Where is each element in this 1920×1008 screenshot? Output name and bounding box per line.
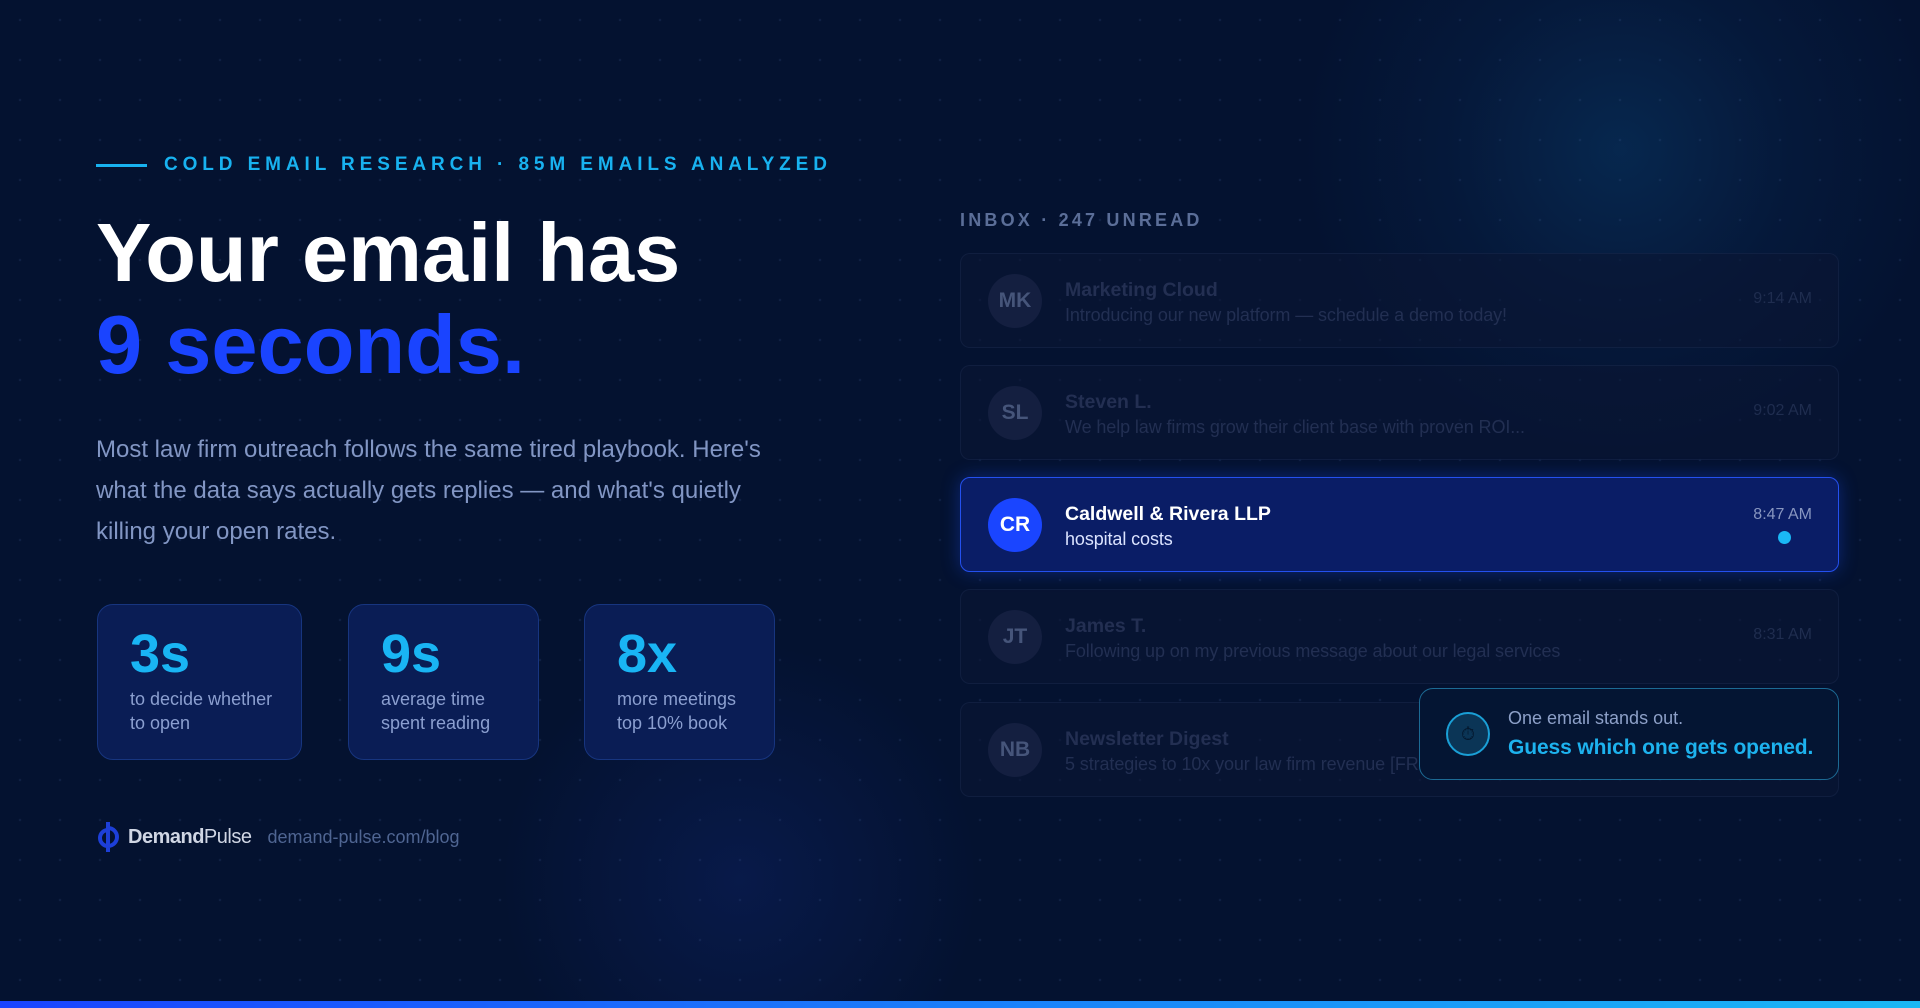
stat card: 3s bbox=[97, 604, 302, 760]
email row: MK: Marketing Cloud bbox=[1065, 279, 1218, 301]
stat card: 3s: to open bbox=[130, 713, 190, 733]
bottom bar bbox=[0, 1001, 1920, 1008]
inbox header: INBOX · 247 UNREAD bbox=[960, 210, 1203, 230]
email row: SL: Steven L. bbox=[1065, 391, 1152, 413]
icon: stopwatch: ⏱ bbox=[1461, 724, 1475, 744]
icon: stopwatch bbox=[1446, 712, 1490, 756]
email row: CR highlighted: 8:47 AM bbox=[1753, 506, 1812, 523]
email row: MK: Introducing our new platform — schedule a demo today! bbox=[1065, 305, 1507, 325]
eyebrow: COLD EMAIL RESEARCH · 85M EMAILS ANALYZED bbox=[164, 154, 832, 175]
footer brand bbox=[98, 822, 460, 852]
email row: CR highlighted: hospital costs bbox=[1065, 529, 1173, 549]
email row: JT: Following up on my previous message about our legal services bbox=[1065, 641, 1560, 661]
email row: SL: We help law firms grow their client base with proven ROI... bbox=[1065, 417, 1525, 437]
email row: NB: 5 strategies to 10x your law firm revenue [FREE GUIDE] bbox=[1065, 754, 1509, 774]
stat card: 3s: 3s bbox=[130, 624, 190, 684]
email row: NB: 8:15 AM bbox=[1753, 739, 1812, 756]
email row: MK: 9:14 AM bbox=[1753, 290, 1812, 307]
email row: SL: SL bbox=[1002, 401, 1028, 424]
email row: MK bbox=[960, 253, 1839, 348]
email row: NB bbox=[960, 702, 1839, 797]
title: 9 seconds. bbox=[96, 298, 525, 391]
footer brand: demand-pulse.com/blog bbox=[267, 826, 460, 846]
stat card: 8x: top 10% book bbox=[617, 713, 727, 733]
callout bbox=[1419, 688, 1839, 780]
stat card: 9s: 9s bbox=[381, 624, 441, 684]
stat card: 3s: to decide whether bbox=[130, 689, 272, 709]
title bbox=[96, 206, 680, 391]
footer brand: DemandPulse bbox=[128, 826, 251, 848]
callout: Guess which one gets opened. bbox=[1508, 736, 1813, 759]
email row: CR highlighted: CR bbox=[1000, 513, 1030, 536]
icon: logo bbox=[98, 822, 119, 852]
email row: MK: MK bbox=[999, 289, 1031, 312]
email row: JT bbox=[960, 589, 1839, 684]
stat card: 9s: average time bbox=[381, 689, 485, 709]
title: Your email has bbox=[96, 206, 680, 299]
paragraph: Most law firm outreach follows the same tired playbook. Here's what the data says actually gets replies — and what's quietly killing your open rates. bbox=[96, 436, 761, 545]
email row: NB: Newsletter Digest bbox=[1065, 728, 1229, 750]
email row: JT: James T. bbox=[1065, 615, 1146, 637]
email row: JT: JT bbox=[1003, 625, 1027, 648]
email row: NB: NB bbox=[1000, 738, 1030, 761]
callout: One email stands out. bbox=[1508, 708, 1683, 728]
stat card: 8x: more meetings bbox=[617, 689, 736, 709]
email row: SL bbox=[960, 365, 1839, 460]
email row: CR highlighted: Caldwell & Rivera LLP bbox=[1065, 503, 1271, 525]
stat card: 8x bbox=[584, 604, 775, 760]
stat card: 9s: spent reading bbox=[381, 713, 490, 733]
email row: JT: 8:31 AM bbox=[1753, 626, 1812, 643]
stat card: 8x: 8x bbox=[617, 624, 677, 684]
stat card: 9s bbox=[348, 604, 539, 760]
email row: CR highlighted bbox=[960, 477, 1839, 572]
email row: SL: 9:02 AM bbox=[1753, 402, 1812, 419]
